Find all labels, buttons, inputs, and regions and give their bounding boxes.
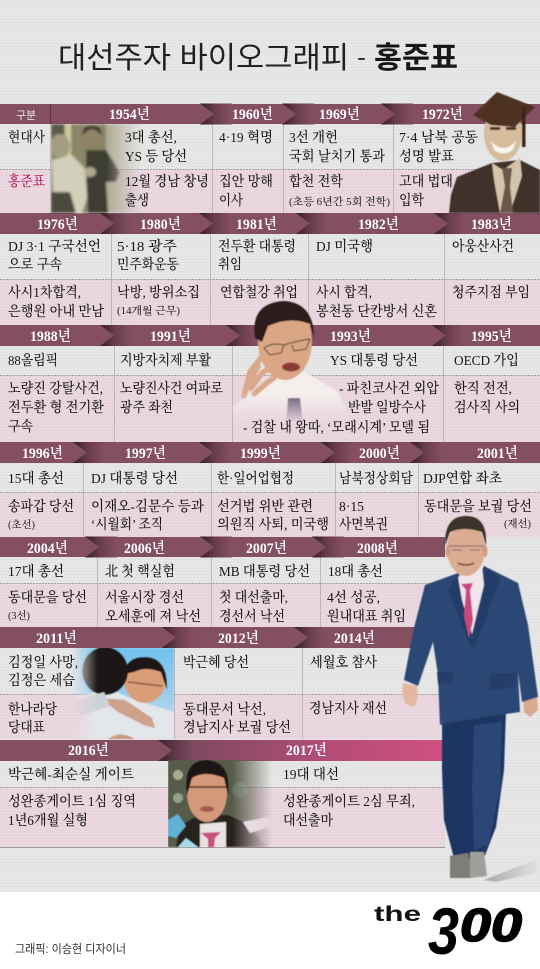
title: - — [357, 42, 366, 72]
2017 history: 19대 대선 — [283, 766, 339, 783]
photo: prosecutor-era portrait with raised hand — [232, 301, 352, 422]
row 3 years: 1991년 — [150, 327, 191, 345]
row 1 years: 1969년 — [319, 105, 360, 123]
2017 personal — [283, 793, 415, 829]
1982 history: DJ 미국행 — [316, 238, 373, 255]
column dividers and row separators — [0, 124, 540, 788]
2004 personal: (3선) — [8, 609, 30, 622]
1993 personal — [243, 380, 439, 436]
1997 personal: ‘시월회’ 조직 — [91, 516, 163, 533]
row 7 years: 2017년 — [286, 741, 327, 759]
2006 personal: 오세훈에 져 낙선 — [105, 608, 201, 625]
pink table rows — [0, 169, 540, 848]
logo: the300 — [374, 894, 522, 968]
row 2 years: 1981년 — [236, 215, 277, 233]
1991 history: 지방자치제 부활 — [120, 352, 211, 369]
2001 history: DJP연합 좌초 — [423, 470, 502, 487]
2012 personal: 동대문서 낙선, — [183, 701, 266, 718]
1980 history: 5·18 광주 — [117, 238, 177, 255]
1969 history — [289, 129, 385, 165]
1999 personal — [217, 498, 329, 533]
1976 personal: 은행원 아내 만남 — [8, 303, 104, 320]
1960 personal: 집안 망해 — [219, 173, 273, 190]
1969 history: 3선 개헌 — [289, 129, 338, 146]
2012 personal — [183, 701, 291, 736]
label: Hong Joon-pyo: 홍준표 — [8, 173, 45, 190]
1972 history: 7·4 남북 공동 — [399, 129, 478, 146]
1954 personal: 12월 경남 창녕 — [125, 173, 209, 190]
row 5 events — [8, 563, 406, 625]
row 1 years — [109, 105, 463, 123]
row 1 years: 1972년 — [422, 105, 463, 123]
2012 personal: 경남지사 보궐 당선 — [183, 719, 291, 736]
1976 history — [8, 238, 101, 273]
1999 history: 한·일어업협정 — [217, 470, 294, 487]
1969 personal — [289, 173, 391, 208]
1991 personal: 노량진사건 여파로 — [120, 380, 223, 397]
title: 홍준표 — [374, 42, 458, 75]
1972 personal — [399, 173, 453, 209]
row 3 years — [30, 327, 512, 345]
1976 personal: 사시1차합격, — [8, 284, 81, 301]
1981 history — [218, 238, 296, 273]
2008 history: 18대 총선 — [328, 563, 383, 580]
1981 history: 전두환 대통령 — [218, 238, 296, 255]
1988 personal: 전두환 형 전기환 — [8, 399, 104, 416]
1976 history: 으로 구속 — [8, 257, 62, 273]
2008 personal — [327, 589, 406, 625]
row 2 years: 1983년 — [471, 215, 512, 233]
1954 history: YS 등 당선 — [125, 148, 187, 165]
2016 personal: 성완종게이트 1심 징역 — [8, 793, 136, 810]
1980 history: 민주화운동 — [117, 256, 179, 273]
1997 history: DJ 대통령 당선 — [91, 470, 178, 487]
row 3 years: 1988년 — [30, 327, 71, 345]
2006 personal — [105, 589, 201, 625]
2007 history: MB 대통령 당선 — [219, 563, 310, 580]
row 5 years: 2007년 — [246, 539, 287, 557]
logo: the300: the — [374, 903, 421, 926]
row 6 events — [8, 654, 387, 736]
row 4 years: 1996년 — [22, 444, 63, 462]
row 1 years: 1960년 — [232, 105, 273, 123]
2014 history: 세월호 참사 — [310, 654, 377, 671]
1993 personal: 반발 일방수사 — [348, 399, 426, 416]
2000 personal: 사면복권 — [339, 516, 388, 533]
1976 history: DJ 3·1 구국선언 — [8, 238, 101, 255]
row 6 years — [36, 629, 375, 647]
credit line: 그래픽: 이승현 디자이너 — [15, 942, 126, 956]
1996 personal: 송파갑 당선 — [8, 498, 74, 515]
1980 personal: 낙방, 방위소집 — [117, 284, 200, 301]
row 3 events — [8, 352, 520, 436]
2004 history: 17대 총선 — [8, 563, 64, 580]
row 2 years: 1976년 — [37, 215, 78, 233]
1980 personal — [117, 284, 200, 317]
1954 history: 3대 총선, — [125, 129, 177, 146]
label: category: 구분 — [16, 110, 36, 122]
row 7 events — [8, 766, 415, 829]
1983 personal: 청주지점 부임 — [452, 284, 530, 301]
1960 personal — [219, 173, 273, 209]
photo: Hong Joon-pyo walking, full figure — [402, 516, 540, 882]
row 7 years: 2016년 — [68, 741, 109, 759]
1982 personal — [316, 284, 437, 320]
2016 personal: 1년6개월 실형 — [8, 812, 88, 829]
group label column — [8, 110, 45, 190]
2007 personal: 경선서 낙선 — [219, 608, 285, 625]
2011 history — [8, 654, 78, 689]
1981 personal: 연합철강 취업 — [220, 284, 298, 301]
row 6 years: 2014년 — [334, 629, 375, 647]
1969 personal: (초등 6년간 5회 전학) — [289, 195, 391, 208]
2001 personal: 동대문을 보궐 당선 — [424, 498, 532, 515]
1988 history: 88올림픽 — [8, 352, 58, 369]
1999 personal: 선거법 위반 관련 — [217, 498, 313, 515]
footer white area — [0, 892, 540, 969]
2000 history: 남북정상회담 — [339, 470, 413, 487]
2017 personal: 대선출마 — [283, 812, 333, 829]
1997 personal: 이재오-김문수 등과 — [91, 498, 204, 515]
2000 personal: 8·15 — [339, 500, 364, 515]
1981 history: 취임 — [218, 256, 242, 273]
row 4 years: 2001년 — [477, 444, 518, 462]
photo: press scrum portrait — [168, 760, 272, 847]
2006 history: 北 첫 핵실험 — [105, 563, 175, 580]
row 1 events — [125, 129, 478, 209]
1954 personal: 출생 — [125, 192, 149, 209]
logo: the300: 00 — [460, 899, 522, 951]
2008 personal: 4선 성공, — [327, 589, 380, 606]
2004 personal: 동대문을 당선 — [8, 589, 87, 606]
row 2 years: 1982년 — [358, 215, 399, 233]
2017 personal: 성완종게이트 2심 무죄, — [283, 793, 415, 810]
2004 personal — [8, 589, 87, 622]
title: 대선주자 바이오그래피 — [58, 42, 349, 75]
1993 personal: - 검찰 내 왕따, ‘모래시계’ 모델 됨 — [243, 419, 430, 436]
2012 history: 박근혜 당선 — [183, 654, 249, 671]
1972 personal: 입학 — [399, 192, 424, 209]
1993 personal: - 파친코사건 외압 — [339, 380, 439, 397]
2000 personal — [339, 500, 388, 533]
row 1 years: 1954년 — [109, 105, 150, 123]
2011 personal: 당대표 — [8, 719, 45, 736]
photo: embrace against blue sky — [72, 647, 174, 739]
row 4 years: 1997년 — [125, 444, 166, 462]
1982 personal: 사시 합격, — [316, 284, 372, 301]
1995 history: OECD 가입 — [454, 352, 519, 369]
2011 history: 김정은 세습 — [8, 672, 75, 689]
1954 personal — [125, 173, 209, 209]
1969 history: 국회 날치기 통과 — [289, 148, 385, 165]
row 7 years — [68, 741, 327, 759]
1983 history: 아웅산사건 — [452, 238, 514, 255]
row 2 years: 1980년 — [140, 215, 181, 233]
row 5 years: 2004년 — [27, 539, 68, 557]
1982 personal: 봉천동 단칸방서 신혼 — [316, 303, 437, 320]
row 2 events — [8, 238, 530, 320]
row 4 events — [8, 470, 532, 533]
1991 personal: 광주 좌천 — [120, 399, 173, 416]
row 5 years: 2008년 — [357, 539, 398, 557]
1997 personal — [91, 498, 204, 533]
row 4 years — [22, 444, 518, 462]
1988 personal: 노량진 강탈사건, — [8, 380, 103, 397]
row 4 years: 2000년 — [359, 444, 400, 462]
1980 personal: (14개월 근무) — [117, 304, 181, 317]
2016 history: 박근혜-최순실 게이트 — [8, 766, 134, 783]
1960 history: 4·19 혁명 — [219, 129, 273, 146]
row 2 years — [37, 215, 512, 233]
1995 personal — [454, 380, 520, 416]
2007 personal: 첫 대선출마, — [219, 589, 288, 606]
1995 personal: 검사직 사의 — [454, 399, 520, 416]
row 3 years: 1995년 — [471, 327, 512, 345]
1991 personal — [120, 380, 223, 416]
1954 history — [125, 129, 187, 165]
label: contemporary history: 현대사 — [8, 129, 45, 146]
2011 personal — [8, 701, 57, 736]
1996 history: 15대 총선 — [8, 470, 64, 487]
row 4 years: 1999년 — [240, 444, 281, 462]
2001 personal — [424, 498, 532, 530]
2011 history: 김정일 사망, — [8, 654, 78, 671]
1988 personal — [8, 380, 104, 435]
1960 personal: 이사 — [219, 192, 243, 209]
1996 personal: (초선) — [8, 518, 35, 531]
2008 personal: 원내대표 취임 — [327, 608, 406, 625]
row 3 years: 1993년 — [330, 327, 371, 345]
row 5 years: 2006년 — [124, 539, 165, 557]
row 6 years: 2011년 — [36, 629, 77, 647]
row 6 years: 2012년 — [218, 629, 259, 647]
1980 history — [117, 238, 179, 273]
year band rows — [0, 104, 540, 761]
2001 personal: (재선) — [504, 517, 531, 530]
1976 personal — [8, 284, 104, 320]
photo: young man in graduation cap and gown — [449, 92, 540, 213]
photo: mother and child — [50, 124, 141, 213]
1995 personal: 한직 전전, — [454, 380, 512, 397]
2011 personal: 한나라당 — [8, 701, 57, 718]
1993 history: YS 대통령 당선 — [330, 352, 418, 369]
1999 personal: 의원직 사퇴, 미국행 — [217, 516, 329, 533]
1969 personal: 합천 전학 — [289, 173, 343, 190]
1972 history — [399, 129, 478, 165]
1996 personal — [8, 498, 74, 531]
logo: the300: 3 — [428, 894, 459, 968]
2014 personal: 경남지사 재선 — [309, 700, 387, 717]
1988 personal: 구속 — [8, 419, 33, 435]
1972 personal: 고대 법대 — [399, 173, 453, 190]
2006 personal: 서울시장 경선 — [105, 589, 184, 606]
2016 personal — [8, 793, 136, 829]
1972 history: 성명 발표 — [399, 148, 454, 165]
2007 personal — [219, 589, 288, 625]
row 5 years — [27, 539, 398, 557]
